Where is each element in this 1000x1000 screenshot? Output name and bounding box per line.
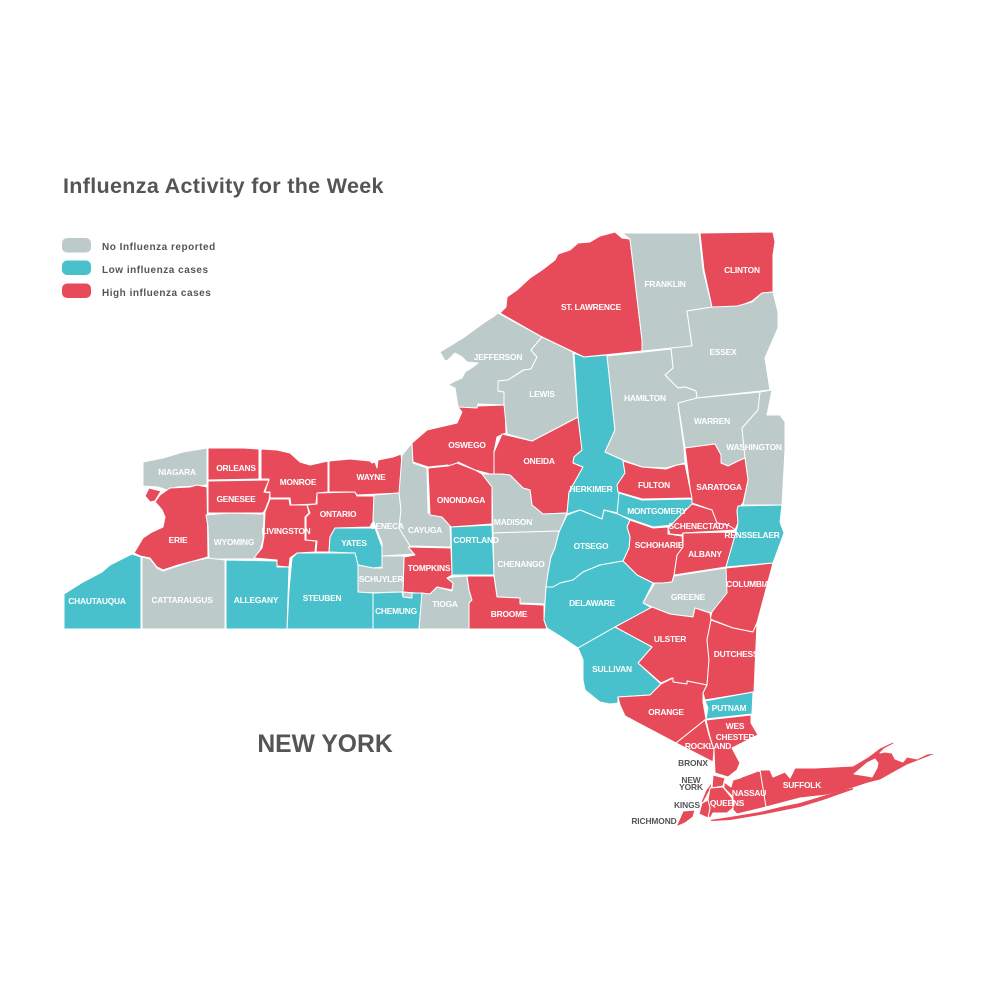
county labels: MONROE: [280, 477, 317, 487]
county: Otsego: [546, 510, 630, 587]
county labels: CLINTON: [724, 265, 760, 275]
county: Niagara: [143, 448, 207, 490]
county: Montgomery: [617, 493, 692, 527]
outside labels for New York City boroughs: [631, 758, 708, 826]
county labels: SCHENECTADY: [669, 521, 730, 531]
county labels: WYOMING: [214, 537, 254, 547]
county labels: SCHUYLER: [359, 574, 403, 584]
county labels: ALBANY: [688, 549, 722, 559]
county labels: MADISON: [494, 517, 532, 527]
legend item: no influenza: No Influenza reported: [102, 242, 216, 253]
county labels: ERIE: [169, 535, 188, 545]
county: Schoharie: [623, 520, 683, 583]
county labels: STEUBEN: [303, 593, 341, 603]
state name: NEW YORK: [257, 731, 393, 758]
county: Onondaga: [428, 463, 492, 527]
map of New York counties: [64, 232, 938, 827]
county labels: COLUMBIA: [726, 579, 770, 589]
county labels: ESSEX: [710, 347, 737, 357]
county labels: FRANKLIN: [644, 279, 686, 289]
county labels: LIVINGSTON: [261, 526, 311, 536]
county labels: DUTCHESS: [714, 649, 759, 659]
county: Oswego: [412, 405, 506, 475]
county: Greene: [643, 568, 727, 617]
county labels: FULTON: [638, 480, 670, 490]
county: Cattaraugus: [142, 557, 225, 629]
county: Suffolk: [760, 742, 938, 807]
county: Warren: [678, 392, 760, 466]
county labels: CORTLAND: [453, 535, 499, 545]
county labels: CATTARAUGUS: [151, 595, 213, 605]
county: Tompkins: [403, 547, 453, 594]
county: Putnam: [705, 692, 753, 719]
county: Essex: [665, 292, 778, 398]
county labels: QUEENS: [710, 798, 745, 808]
county labels: WAYNE: [357, 472, 386, 482]
county labels: HERKIMER: [569, 484, 613, 494]
county: Bronx: [712, 775, 725, 788]
county: Ontario: [306, 492, 374, 552]
county: Dutchess: [703, 620, 757, 700]
county labels: WASHINGTON: [726, 442, 782, 452]
outside labels for New York City boroughs: RICHMOND: [631, 816, 677, 826]
county: Queens: [708, 787, 733, 818]
county labels: NASSAU: [732, 788, 766, 798]
outside labels for New York City boroughs: BRONX: [678, 758, 708, 768]
county labels: CHENANGO: [497, 559, 545, 569]
county: Yates: [329, 528, 382, 568]
county labels: NIAGARA: [158, 467, 196, 477]
outside labels for New York City boroughs: YORK: [679, 782, 703, 792]
county labels: ONTARIO: [320, 509, 357, 519]
county: Saratoga: [685, 444, 748, 530]
barrier island: [710, 788, 853, 821]
county labels: CHESTER: [716, 732, 754, 742]
county: Clinton: [700, 232, 775, 307]
county: Richmond: [676, 810, 695, 827]
county: Allegany: [226, 560, 289, 629]
county labels: RENSSELAER: [724, 530, 780, 540]
county: Fulton: [617, 461, 692, 499]
county: Columbia: [710, 563, 773, 632]
county: Kings: [699, 800, 710, 818]
county labels: SARATOGA: [696, 482, 742, 492]
county labels: DELAWARE: [569, 598, 616, 608]
county labels: GENESEE: [216, 494, 256, 504]
county: Broome: [467, 576, 547, 629]
legend item: high influenza: [62, 284, 211, 299]
county: St. Lawrence: [500, 232, 642, 357]
county: Chemung: [373, 592, 422, 629]
county labels: ORANGE: [648, 707, 684, 717]
legend item: low influenza: [62, 260, 209, 276]
county: Nassau: [724, 771, 766, 814]
county: New York: [701, 782, 712, 803]
county: Sullivan: [578, 627, 661, 704]
county labels: SUFFOLK: [783, 780, 821, 790]
outside labels for New York City boroughs: KINGS: [674, 800, 701, 810]
county: Livingston: [254, 499, 316, 567]
county: Oneida: [494, 417, 583, 514]
county labels: WES: [726, 721, 745, 731]
county: Schenectady: [668, 504, 736, 535]
county labels: HAMILTON: [624, 393, 666, 403]
county: Wayne: [329, 454, 403, 495]
county labels: SCHOHARIE: [635, 540, 684, 550]
county: Westchester: [706, 715, 758, 777]
county: Lewis: [498, 337, 578, 441]
county: Seneca: [373, 493, 415, 556]
county labels: ONEIDA: [523, 456, 555, 466]
county labels: [68, 265, 821, 808]
county: Rockland: [676, 720, 714, 762]
county: Madison: [482, 474, 567, 533]
county: Orange: [618, 678, 707, 743]
county: Washington: [742, 390, 785, 505]
legend item: high influenza: High influenza cases: [102, 288, 211, 299]
county labels: MONTGOMERY: [627, 506, 687, 516]
county: Franklin: [622, 233, 712, 351]
county labels: LEWIS: [529, 389, 555, 399]
county labels: ALLEGANY: [234, 595, 279, 605]
county labels: OSWEGO: [448, 440, 486, 450]
county labels: SENECA: [370, 521, 404, 531]
county labels: CHEMUNG: [375, 606, 417, 616]
legend item: no influenza: [62, 238, 216, 253]
county: Herkimer: [567, 353, 625, 519]
legend: [62, 238, 216, 299]
county labels: CAYUGA: [408, 525, 442, 535]
county labels: WARREN: [694, 416, 730, 426]
county: Rensselaer: [726, 505, 784, 567]
county labels: ONONDAGA: [437, 495, 485, 505]
county labels: GREENE: [671, 592, 706, 602]
county labels: ST. LAWRENCE: [561, 302, 622, 312]
legend item: low influenza: Low influenza cases: [102, 265, 209, 276]
county labels: ROCKLAND: [685, 741, 731, 751]
county: Chautauqua: [64, 554, 141, 629]
county: Erie: [134, 485, 208, 570]
county: Schuyler: [358, 556, 412, 598]
county: Genesee: [208, 480, 270, 513]
county: Orleans: [208, 448, 259, 480]
county: Albany: [674, 532, 736, 575]
title: Influenza Activity for the Week: [63, 174, 384, 198]
county labels: OTSEGO: [574, 541, 609, 551]
county labels: SULLIVAN: [592, 664, 632, 674]
county: Hamilton: [605, 349, 697, 468]
county labels: JEFFERSON: [474, 352, 522, 362]
county: Wyoming: [206, 513, 264, 559]
county: Tioga: [419, 576, 472, 629]
county labels: TOMPKINS: [408, 563, 451, 573]
county labels: YATES: [341, 538, 367, 548]
county: Monroe: [261, 449, 328, 505]
county: Chenango: [493, 531, 559, 604]
county labels: BROOME: [491, 609, 528, 619]
county labels: CHAUTAUQUA: [68, 596, 126, 606]
outside labels for New York City boroughs: NEW: [681, 775, 701, 785]
county: Steuben: [287, 553, 373, 629]
county labels: TIOGA: [432, 599, 458, 609]
county labels: PUTNAM: [712, 703, 747, 713]
county: Jefferson: [440, 313, 542, 408]
county: Cayuga: [399, 443, 451, 547]
county labels: ULSTER: [654, 634, 686, 644]
county: Cortland: [451, 525, 494, 575]
county: Ulster: [615, 607, 711, 685]
county labels: ORLEANS: [216, 463, 256, 473]
county: Delaware: [544, 561, 653, 648]
